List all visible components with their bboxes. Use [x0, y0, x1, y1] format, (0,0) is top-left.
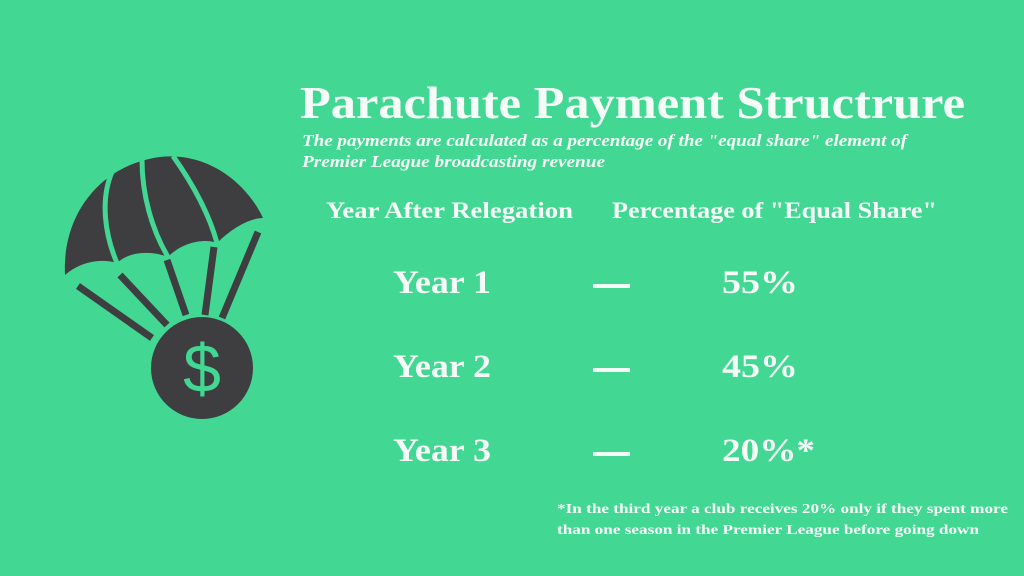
row: year 3	[393, 433, 815, 469]
subtitle: Premier League broadcasting revenue	[301, 152, 605, 171]
row: year 1: Year 1	[393, 265, 491, 301]
dollar sign: $	[183, 331, 221, 407]
icon: parachute with dollar coin	[65, 156, 263, 419]
canopy	[65, 156, 263, 275]
row: year 1: 55%	[722, 265, 798, 301]
footnote: than one season in the Premier League before going down	[557, 523, 979, 538]
suspension lines	[78, 232, 258, 338]
coin	[151, 317, 253, 419]
column headers	[326, 198, 937, 223]
row: year 2	[393, 349, 798, 385]
row: year 1	[393, 265, 798, 301]
subtitle: The payments are calculated as a percentage of the "equal share" element of	[302, 131, 909, 150]
footnote	[557, 502, 1008, 538]
footnote: *In the third year a club receives 20% only if they spent more	[557, 502, 1008, 517]
title: Parachute Payment Structrure	[300, 77, 965, 128]
column headers: Year After Relegation	[326, 198, 573, 223]
column headers: Percentage of "Equal Share"	[612, 198, 937, 223]
row: year 2: 45%	[722, 349, 798, 385]
row: year 3: Year 3	[393, 433, 491, 469]
row: year 2: Year 2	[393, 349, 491, 385]
row: year 3: 20%*	[722, 433, 815, 469]
subtitle	[301, 131, 909, 171]
